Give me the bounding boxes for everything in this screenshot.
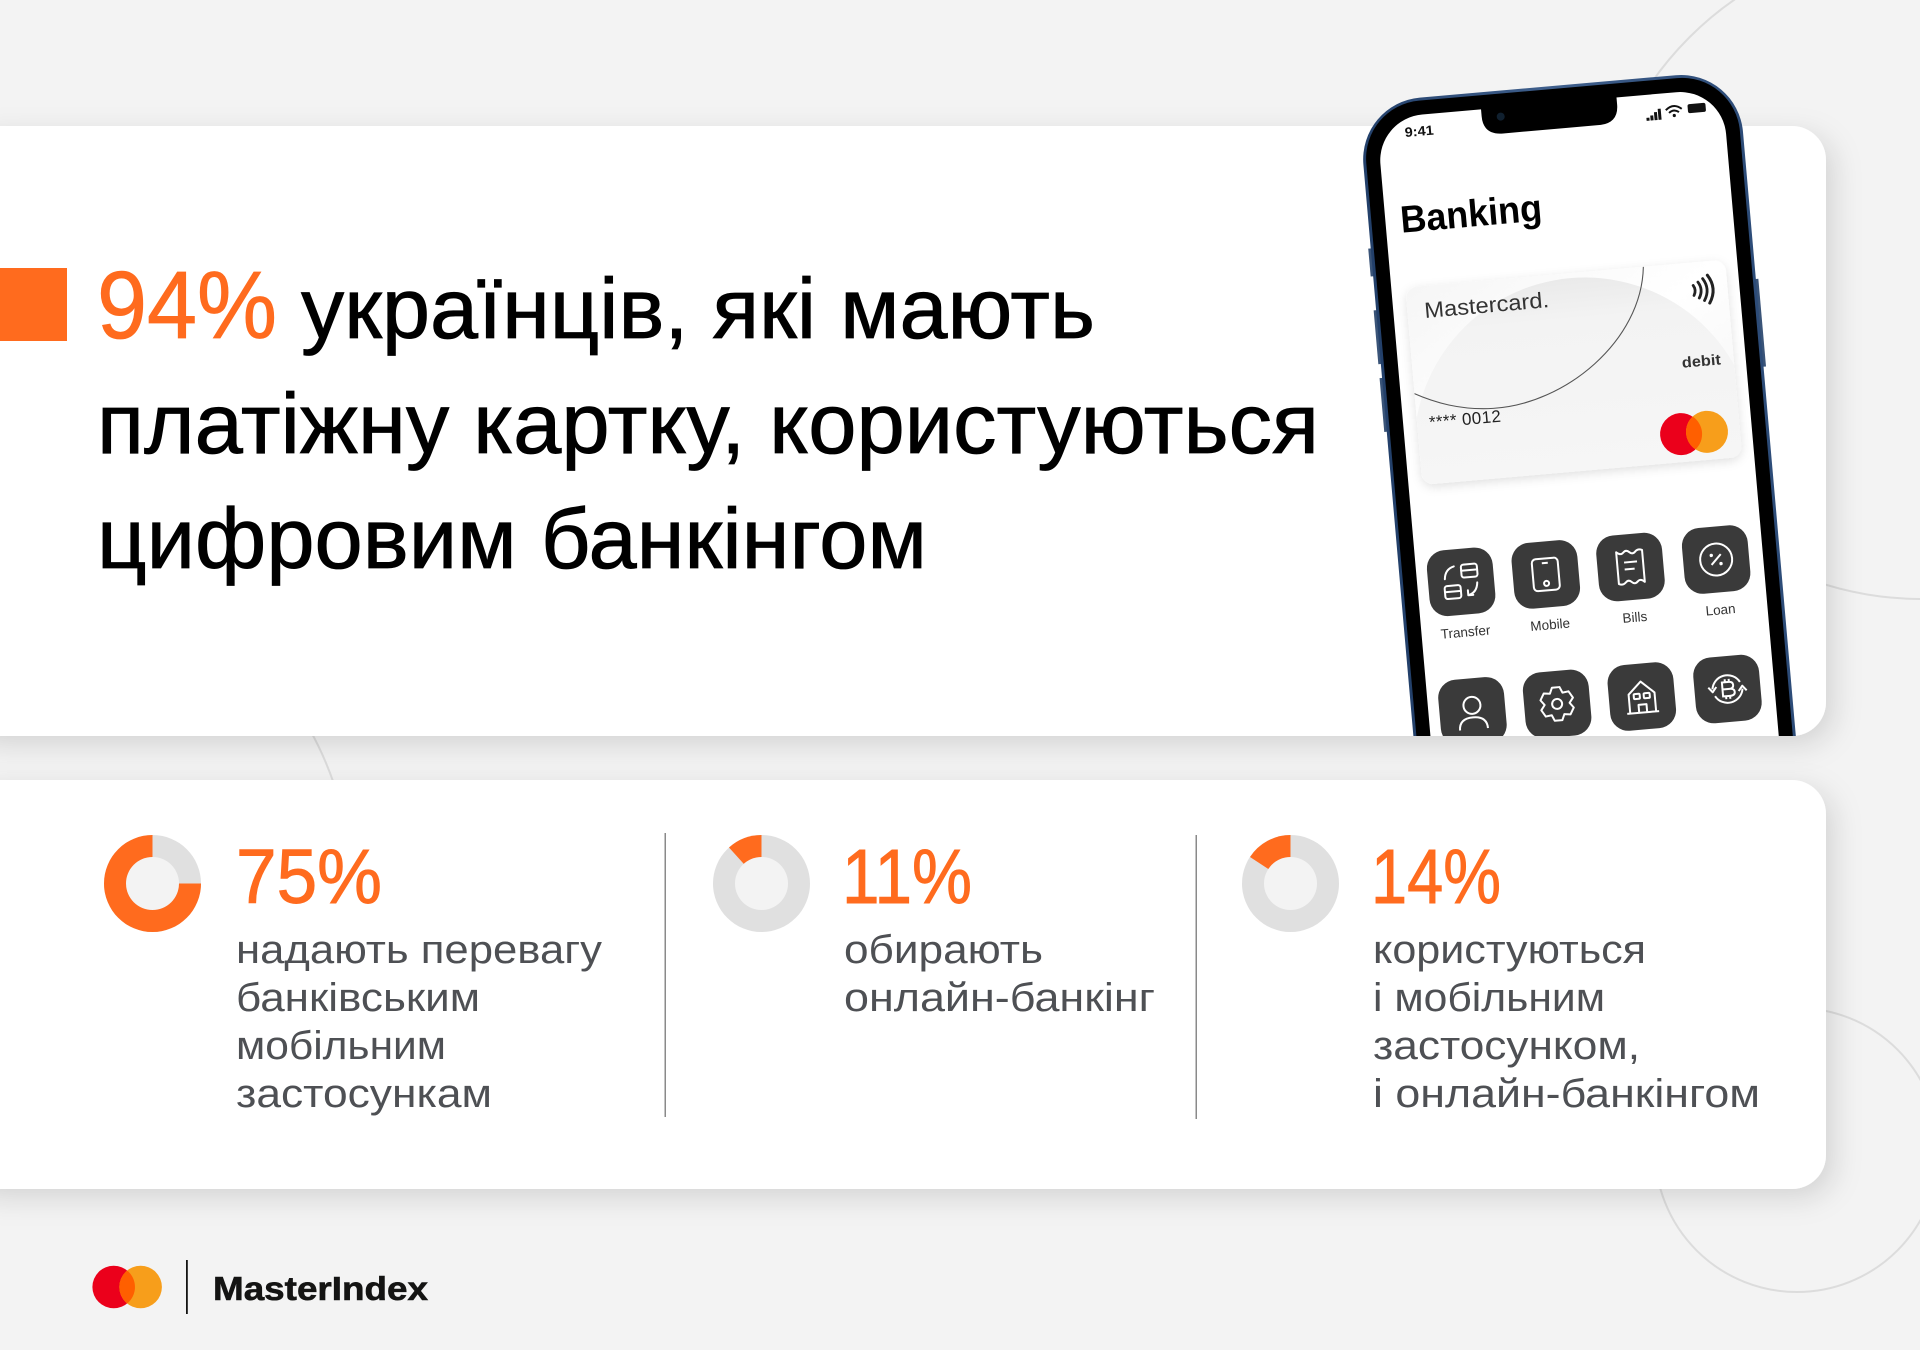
description: надають перевагу — [236, 928, 602, 972]
heading: українців, які мають — [301, 262, 1095, 357]
description: банківським — [236, 976, 480, 1020]
label: Loan: Loan — [1705, 601, 1736, 619]
status icons — [1646, 103, 1706, 121]
heading: цифровим банкінгом — [97, 492, 927, 587]
app title: Banking — [1399, 187, 1544, 242]
contactless icon — [1692, 275, 1714, 304]
phone screen — [1380, 92, 1779, 736]
description: застосунком, — [1373, 1024, 1640, 1068]
icon: Mastercard logo — [92, 1266, 162, 1308]
app icon: loan — [1680, 524, 1752, 595]
panel: statistics card — [0, 780, 1826, 1189]
description: онлайн-банкінг — [844, 976, 1155, 1020]
description: і онлайн-банкінгом — [1373, 1072, 1760, 1116]
description — [236, 928, 602, 1116]
label: Transfer: Transfer — [1440, 622, 1491, 642]
orange marker square — [0, 268, 67, 341]
panel: headline card — [0, 126, 1826, 736]
app icon: profile — [1438, 677, 1507, 736]
value 11%: 11% — [842, 834, 972, 920]
label: Bills: Bills — [1622, 609, 1648, 626]
description — [1373, 928, 1760, 1116]
label: Mobile: Mobile — [1530, 616, 1571, 634]
heading: 94% — [97, 252, 277, 359]
heading — [97, 252, 1319, 587]
heading: платіжну картку, користуються — [97, 377, 1319, 472]
card logo — [1660, 410, 1728, 456]
notch — [1481, 96, 1619, 135]
description: і мобільним — [1373, 976, 1605, 1020]
description: користуються — [1373, 928, 1646, 972]
card number: **** 0012 — [1428, 407, 1502, 432]
description — [844, 928, 1155, 1020]
app icon: crypto — [1692, 653, 1763, 725]
donut chart 75% — [104, 835, 201, 932]
value 14%: 14% — [1371, 834, 1501, 920]
phone mockup — [1363, 75, 1796, 736]
description: застосункам — [236, 1072, 492, 1116]
donut chart 11% — [713, 835, 810, 932]
stat: 14% — [1242, 834, 1760, 1116]
description: обирають — [844, 928, 1043, 972]
app icon: transfer — [1425, 546, 1497, 618]
app icon: home — [1606, 661, 1678, 732]
stat: 11% — [713, 834, 1155, 1020]
status time: 9:41 — [1404, 122, 1435, 140]
stat: 75% — [104, 834, 602, 1116]
footer brand — [92, 1260, 429, 1314]
value 75%: 75% — [236, 834, 382, 920]
app icon: settings — [1522, 670, 1592, 736]
app icon: mobile — [1510, 539, 1582, 610]
MasterIndex wordmark: MasterIndex — [213, 1270, 429, 1307]
card brand: Mastercard. — [1423, 287, 1550, 323]
description: мобільним — [236, 1024, 446, 1068]
donut chart 14% — [1242, 835, 1339, 932]
app icon: bills — [1595, 531, 1666, 603]
bank card — [1404, 266, 1744, 490]
debit label: debit — [1681, 351, 1722, 372]
